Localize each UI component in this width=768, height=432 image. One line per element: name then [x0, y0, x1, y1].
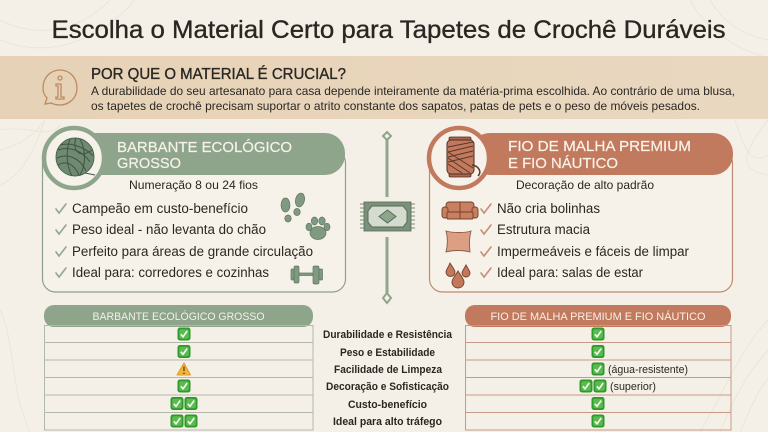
row labels: Durabilidade e Resistência [323, 329, 453, 341]
benefits list: Impermeáveis e fáceis de limpar [497, 244, 689, 259]
benefits list: Ideal para: corredores e cozinhas [72, 265, 269, 280]
icon: yarn cone [429, 128, 489, 188]
icon: water drops [446, 263, 470, 288]
icon: pillow [446, 231, 471, 252]
row labels: Ideal para alto tráfego [333, 416, 442, 428]
icon: dumbbell [291, 266, 322, 284]
comparison table [44, 305, 731, 430]
left column grid [44, 326, 313, 430]
panel heading: BARBANTE ECOLÓGICO [117, 139, 292, 156]
panel: why the material matters [0, 56, 768, 119]
text block: explanation: os tapetes de crochê precisam suportar o atrito constante dos sapatos, patas de pets e o peso de móveis pesados. [91, 99, 700, 113]
row labels: Peso e Estabilidade [340, 347, 435, 359]
subtitle: Decoração de alto padrão [516, 178, 654, 192]
benefits list: Estrutura macia [497, 222, 590, 237]
text block: explanation [91, 84, 735, 113]
row labels: Facilidade de Limpeza [334, 364, 443, 376]
panel: barbante ecológico grosso [42, 128, 346, 292]
icon: rug [360, 202, 415, 231]
benefits list: Peso ideal - não levanta do chão [72, 222, 266, 237]
panel heading: E FIO NÁUTICO [508, 155, 618, 172]
right column ratings: (água-resistente) [608, 364, 688, 376]
right column grid [465, 326, 731, 430]
right column ratings [580, 328, 688, 428]
heading: why: POR QUE O MATERIAL É CRUCIAL? [91, 66, 346, 83]
icon: sofa [442, 202, 478, 219]
benefits list [481, 201, 689, 280]
panel heading: GROSSO [117, 155, 181, 172]
benefits list: Não cria bolinhas [497, 201, 600, 216]
left column header [44, 305, 313, 327]
row labels: Decoração e Sofisticação [326, 381, 449, 393]
row labels: Custo-benefício [348, 399, 427, 411]
text block: explanation: A durabilidade do seu artesanato para casa depende inteiramente da matéria-prima escolhida. Ao contrário de uma blusa, [91, 84, 735, 98]
icon: paw [306, 217, 330, 240]
icon: yarn ball [44, 128, 104, 188]
left column ratings [170, 328, 198, 428]
right column ratings: (superior) [610, 381, 656, 393]
panel heading [508, 138, 691, 172]
benefits list [56, 201, 313, 280]
header pill [62, 133, 345, 175]
benefits list: Perfeito para áreas de grande circulação [72, 244, 313, 259]
icon: info speech bubble [43, 70, 77, 105]
left column header: BARBANTE ECOLÓGICO GROSSO [92, 310, 265, 323]
benefits list: Ideal para: salas de estar [497, 265, 643, 280]
icon: warning [177, 363, 190, 375]
title: Escolha o Material Certo para Tapetes de Crochê Duráveis [52, 16, 726, 44]
benefits list: Campeão em custo-benefício [72, 201, 248, 216]
right column header [465, 305, 731, 327]
icon: footprints [281, 192, 306, 222]
row labels [323, 329, 453, 428]
right column header: FIO DE MALHA PREMIUM E FIO NÁUTICO [490, 310, 706, 323]
subtitle: Numeração 8 ou 24 fios [129, 178, 258, 192]
panel heading: FIO DE MALHA PREMIUM [508, 138, 691, 155]
header pill [470, 133, 733, 175]
panel heading [117, 139, 292, 172]
panel: fio de malha premium e fio náutico [429, 128, 733, 292]
center divider with rug [360, 132, 415, 303]
